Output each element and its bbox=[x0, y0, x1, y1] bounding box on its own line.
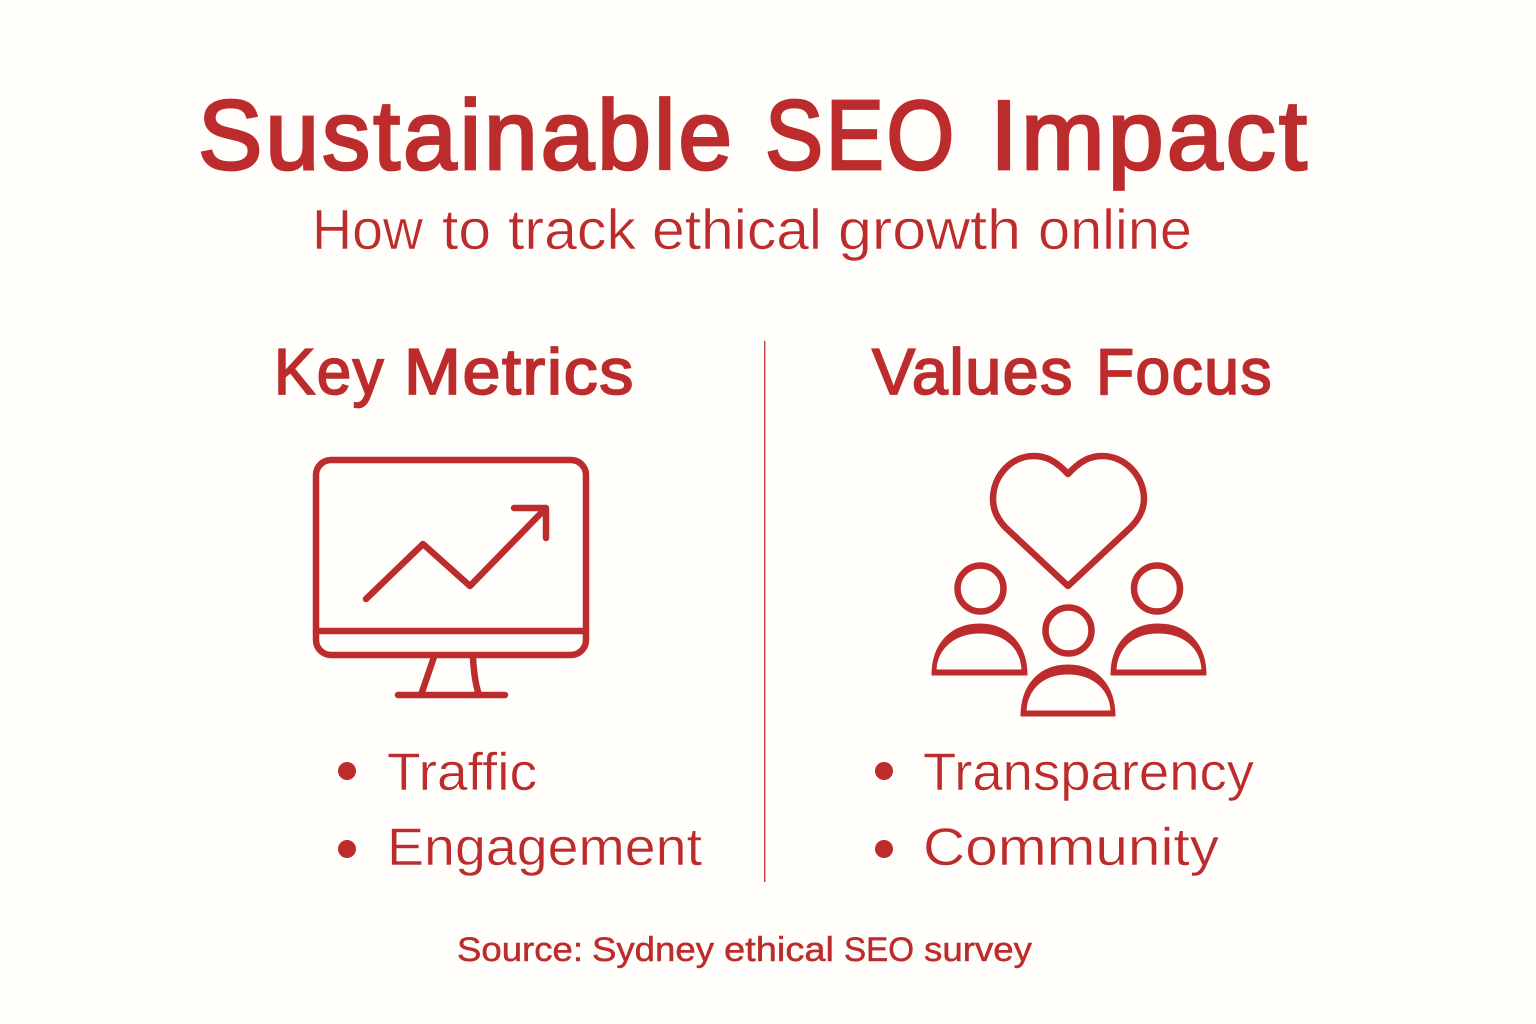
source note: Source: bbox=[457, 931, 583, 969]
title bbox=[198, 80, 1310, 190]
source note bbox=[457, 931, 1032, 969]
source note: SEO bbox=[844, 931, 914, 969]
heading: values focus: Focus bbox=[1096, 335, 1273, 408]
title: Sustainable bbox=[198, 80, 735, 190]
subtitle: growth bbox=[838, 198, 1021, 262]
subtitle bbox=[312, 198, 1192, 262]
column divider bbox=[764, 341, 766, 882]
bullet: community: Community bbox=[923, 818, 1220, 877]
icon: monitor with growth arrow bbox=[316, 460, 586, 695]
subtitle: ethical bbox=[652, 198, 822, 262]
icon: person centre bbox=[1021, 608, 1115, 716]
source note: Sydney bbox=[592, 931, 714, 969]
heading: values focus bbox=[872, 335, 1273, 408]
icon: person left bbox=[932, 566, 1027, 675]
heading: key metrics: Metrics bbox=[404, 335, 635, 408]
subtitle: track bbox=[508, 198, 637, 262]
title: Impact bbox=[990, 80, 1310, 190]
source note: survey bbox=[924, 931, 1032, 969]
subtitle: online bbox=[1038, 198, 1192, 262]
bullet: traffic: Traffic bbox=[387, 743, 537, 802]
heading: key metrics bbox=[274, 335, 635, 408]
title: SEO bbox=[765, 80, 957, 190]
bullet: engagement: Engagement bbox=[387, 818, 702, 877]
bullet: transparency: Transparency bbox=[923, 743, 1254, 802]
subtitle: How bbox=[312, 198, 424, 262]
icon: heart bbox=[993, 456, 1144, 586]
heading: values focus: Values bbox=[872, 335, 1074, 408]
source note: ethical bbox=[724, 931, 834, 969]
heading: key metrics: Key bbox=[274, 335, 385, 408]
subtitle: to bbox=[442, 198, 491, 262]
icon: person right bbox=[1111, 566, 1206, 675]
icon: heart and community bbox=[932, 456, 1206, 716]
